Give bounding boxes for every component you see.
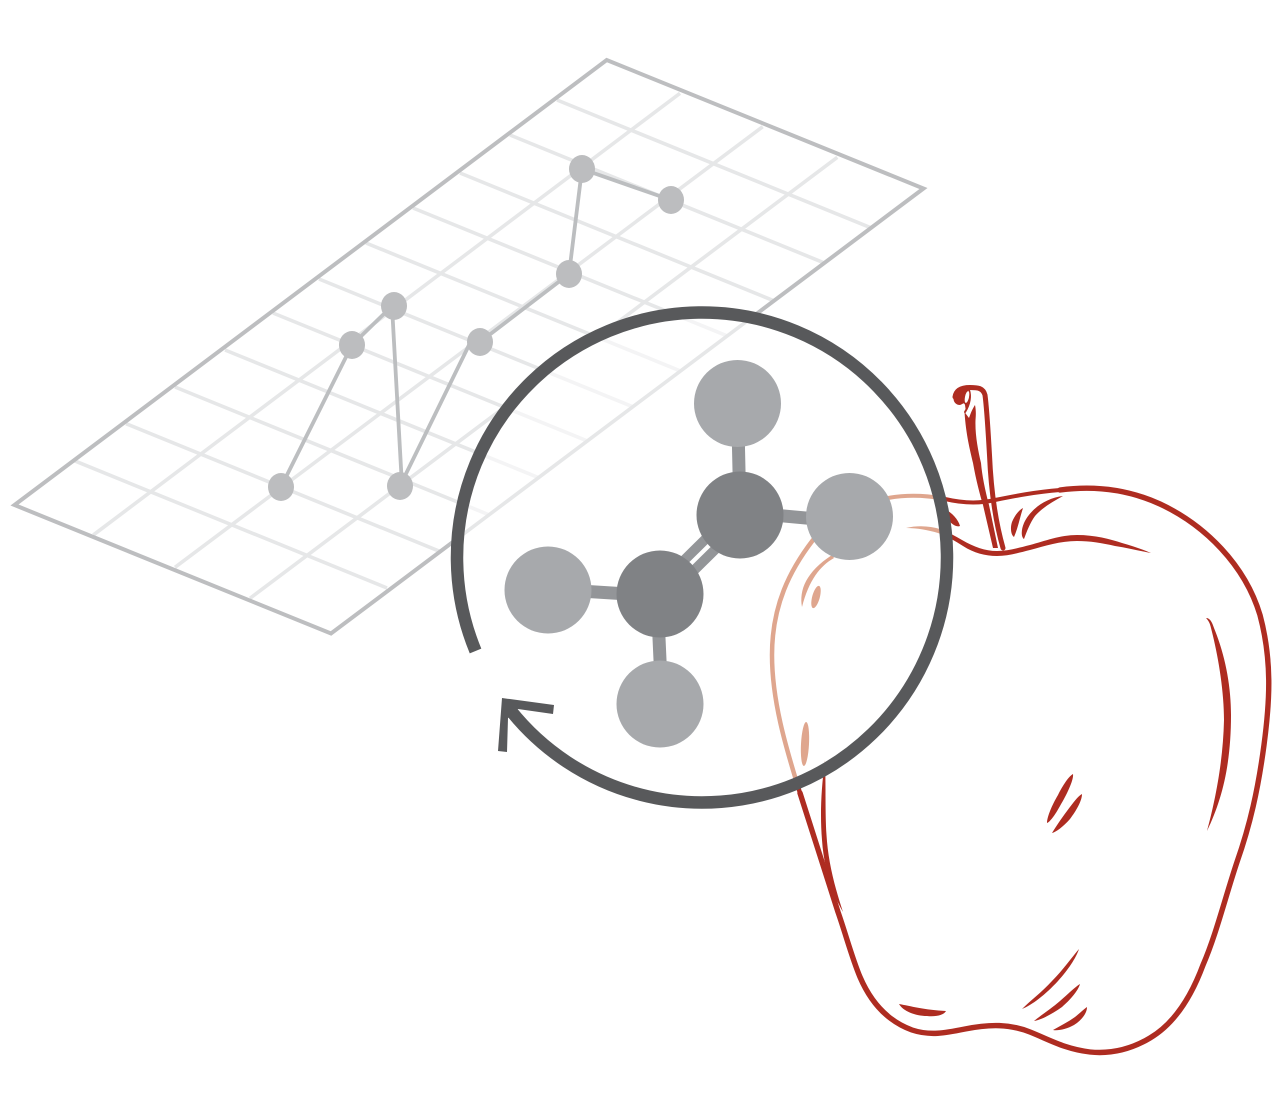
- plate border: [14, 60, 924, 634]
- plate border fading inside the circle: [464, 322, 747, 536]
- connecting lines: [281, 169, 671, 487]
- icon: molecule: [504, 360, 893, 748]
- data points: [268, 155, 684, 501]
- stem curl highlight: [964, 391, 970, 403]
- line chart: connected data points: [268, 155, 684, 501]
- bonds: [548, 404, 850, 704]
- ring arc: [382, 238, 1022, 877]
- grid lines outside the circle: [74, 93, 870, 598]
- icon: apple: [772, 388, 1269, 1052]
- faded grid lines inside the circle: [468, 319, 726, 515]
- panel: perspective graph plate: [14, 60, 924, 634]
- hydrogen atoms: [504, 360, 893, 748]
- arrow: circular cycle arrow: [382, 238, 1022, 877]
- arrow head: [498, 698, 554, 752]
- apple ink outside the circle: [772, 388, 1269, 1052]
- apple ink faded inside the circle: [770, 494, 940, 778]
- carbon atoms: [616, 472, 784, 638]
